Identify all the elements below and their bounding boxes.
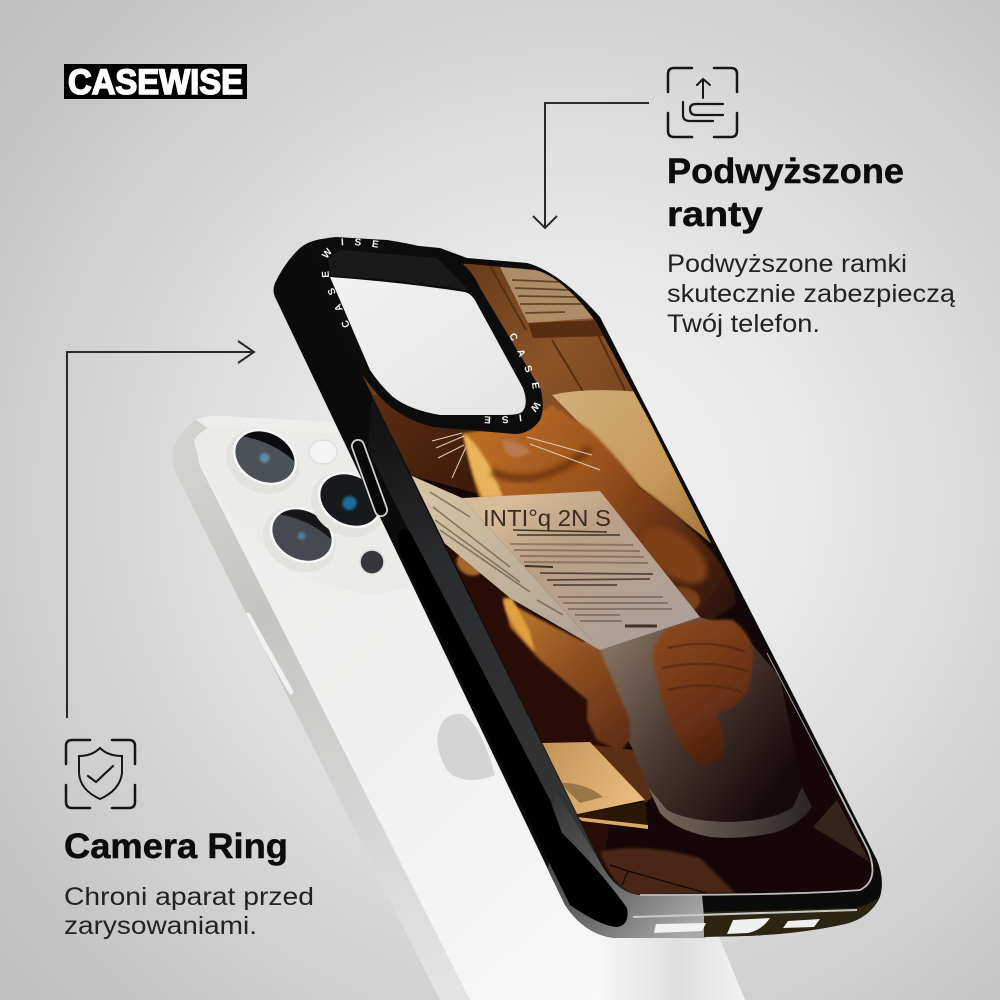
side button 1 bbox=[248, 615, 291, 692]
columns bbox=[510, 530, 672, 626]
volume button bbox=[358, 446, 381, 510]
lens 3 bbox=[312, 472, 382, 537]
left wall bbox=[372, 395, 490, 497]
open book bbox=[540, 742, 648, 829]
white phone bbox=[160, 400, 760, 1000]
camera ring bbox=[321, 237, 543, 434]
cat face shading bbox=[492, 448, 590, 478]
silver rim bbox=[633, 653, 872, 917]
text: raised edges description: Twój telefon. bbox=[667, 310, 820, 338]
right page bbox=[462, 491, 700, 650]
flash bbox=[309, 440, 337, 464]
ring text bottom: CASEWISE bbox=[484, 333, 542, 424]
shadow band bbox=[622, 936, 744, 1000]
text: raised edges description: Podwyższone ramki bbox=[667, 250, 907, 278]
text: camera ring description: Chroni aparat przed bbox=[64, 883, 314, 911]
phone side edge bbox=[172, 420, 470, 1000]
heading: raised edges: Podwyższone bbox=[667, 152, 904, 191]
floor bbox=[600, 848, 735, 895]
masthead: INTI°q 2N S bbox=[483, 505, 611, 531]
charging ports bbox=[654, 918, 820, 934]
ring inner wall highlight bbox=[328, 250, 468, 290]
heading: raised edges bbox=[667, 152, 904, 234]
text: raised edges description: skutecznie zabezpieczą bbox=[667, 280, 955, 308]
heading: camera ring: Camera Ring bbox=[64, 827, 288, 866]
side slot bbox=[398, 528, 628, 927]
arrow: left bbox=[67, 341, 254, 718]
lower left dark wall bbox=[444, 544, 612, 866]
icon: raised edges bbox=[668, 68, 737, 137]
brand logo: CASEWISE bbox=[68, 63, 243, 102]
apple logo bbox=[437, 714, 495, 780]
cat cheek glow bbox=[463, 433, 503, 497]
lower translucent band bbox=[548, 790, 706, 938]
inner band bbox=[368, 395, 605, 872]
toilet seat bbox=[552, 390, 712, 544]
whiskers bbox=[432, 433, 600, 478]
shelf bbox=[528, 320, 610, 338]
text: raised edges description bbox=[667, 250, 955, 338]
camera bump bbox=[194, 428, 207, 454]
plank lines bbox=[488, 262, 625, 395]
lens 2 bbox=[264, 507, 336, 572]
ring text top: CASEWISE bbox=[321, 238, 379, 328]
cat artwork bbox=[362, 264, 872, 895]
cat body bbox=[463, 405, 735, 628]
ring outer bbox=[313, 237, 543, 434]
cat nose highlight bbox=[502, 440, 530, 457]
text: camera ring description: zarysowaniami. bbox=[64, 912, 257, 940]
bottom bezel bbox=[704, 898, 878, 937]
side button 2 bbox=[326, 794, 385, 900]
cat leg bbox=[652, 620, 753, 765]
leg stripes bbox=[662, 644, 750, 692]
wall poster bbox=[500, 267, 595, 323]
toilet bowl bbox=[580, 617, 802, 822]
arrow: top bbox=[533, 103, 649, 228]
newspaper bbox=[410, 475, 700, 650]
phone case bbox=[274, 238, 882, 938]
ring hole bbox=[330, 277, 526, 415]
arm glow bbox=[503, 598, 535, 652]
icon: shield bbox=[66, 740, 135, 808]
small paw bbox=[455, 554, 482, 578]
carpet bbox=[592, 745, 652, 803]
cat forearm bbox=[643, 526, 710, 586]
scrap paper on floor bbox=[813, 800, 870, 862]
cat right paw bbox=[676, 586, 702, 610]
toilet base bbox=[648, 787, 812, 838]
text: camera ring description bbox=[64, 883, 314, 940]
wood wall bbox=[362, 264, 659, 440]
case shell bbox=[274, 238, 882, 938]
heading: raised edges: ranty bbox=[667, 195, 764, 234]
lidar bbox=[360, 550, 384, 574]
lens 1 bbox=[226, 429, 299, 494]
lower arm bbox=[503, 600, 630, 752]
left page bbox=[410, 475, 600, 650]
